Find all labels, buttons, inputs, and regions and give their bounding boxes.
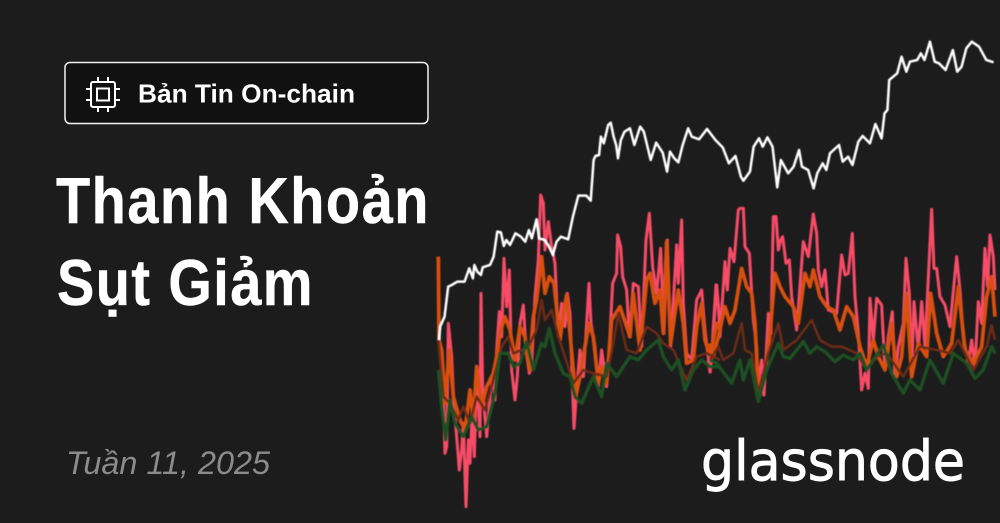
- date: Tuần 11, 2025: [66, 445, 270, 481]
- series: pink: [438, 195, 995, 507]
- series: white price line: [439, 42, 994, 340]
- line chart: [438, 42, 995, 507]
- badge label: Bản Tin On-chain: [138, 78, 355, 108]
- badge: Bản Tin On-chain: [65, 62, 428, 124]
- title: [56, 164, 428, 319]
- series: green: [438, 328, 995, 440]
- series: orange: [438, 242, 995, 430]
- logo: glassnode: glassnode: [701, 429, 965, 493]
- series: dark brown: [438, 300, 995, 423]
- icon: microchip: [86, 77, 120, 112]
- title: Sụt Giảm: [57, 246, 312, 319]
- title: Thanh Khoản: [56, 164, 428, 237]
